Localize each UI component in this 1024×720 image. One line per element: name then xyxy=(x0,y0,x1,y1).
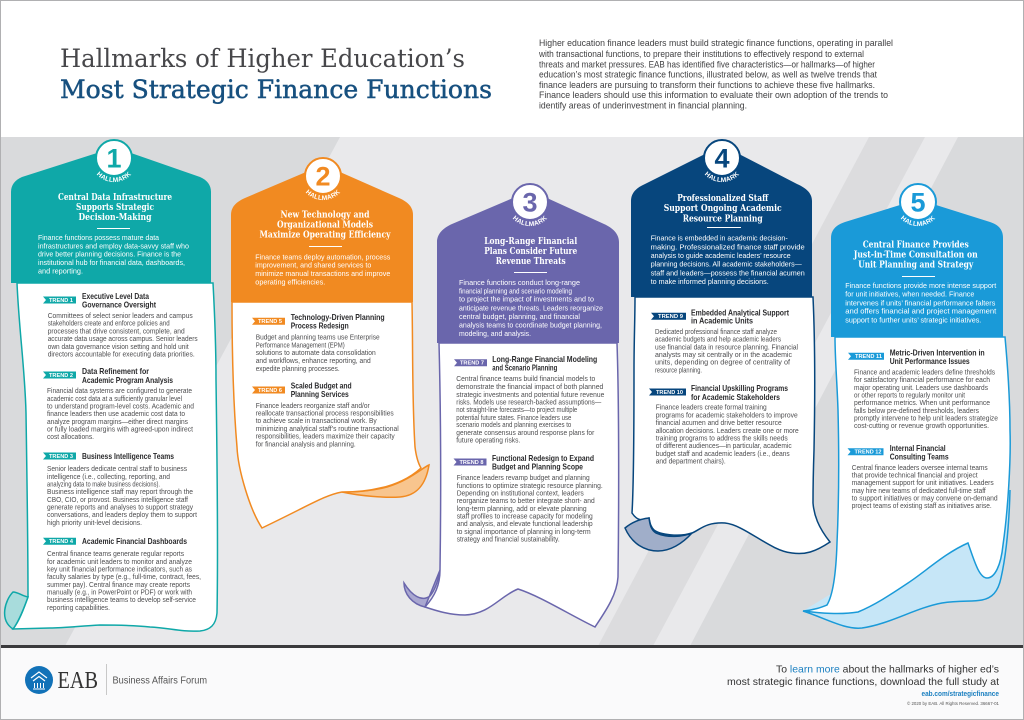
badge number 4 xyxy=(703,139,741,182)
description 5: support to further units’ strategic initiatives. xyxy=(845,315,981,324)
heading 1 xyxy=(58,193,172,229)
panel: hallmark 3 xyxy=(403,183,620,628)
trend 6: for financial analysis and planning. xyxy=(256,442,356,448)
trend 7: scenario models and planning exercises to xyxy=(456,422,571,429)
heading 5: Unit Planning and Strategy xyxy=(858,260,974,270)
trend 8: Finance leaders revamp budget and planning xyxy=(457,475,590,482)
trend 10: financial acumen and drive better resource xyxy=(656,420,782,427)
trend 2: or fully loaded margins with agreed-upon indirect xyxy=(47,426,193,434)
trend 10: allocation decisions. Leaders create one or more xyxy=(656,428,799,435)
trend 10: programs for academic stakeholders to improve xyxy=(656,412,798,420)
description 1: institutional hub for financial data, dashboards, xyxy=(38,258,185,267)
trend 7: not straight-line forecasts—to project multiple xyxy=(456,407,577,414)
trend 1: Governance Oversight xyxy=(82,300,156,310)
description 1: and reporting. xyxy=(38,267,83,276)
header 2 xyxy=(231,172,413,302)
trend 4: key unit financial performance indicators, such as xyxy=(47,566,192,574)
trend 1 xyxy=(43,291,198,359)
trend 7: Central finance teams build financial models to xyxy=(456,376,595,383)
trend 10: TREND 10 xyxy=(656,390,683,396)
trend 7: and Scenario Planning xyxy=(492,362,557,372)
heading 4: Support Ongoing Academic xyxy=(664,204,782,214)
trend 6: minimizing analytical staff’s routine transactional xyxy=(256,426,399,433)
call to action: most strategic finance functions, download the full study at xyxy=(727,676,999,688)
trend 2 xyxy=(43,366,194,441)
trend 4: reporting capabilities. xyxy=(47,605,110,612)
title: Most Strategic Finance Functions xyxy=(60,75,492,104)
trend 12: to support initiatives or may convene on-demand xyxy=(852,496,998,502)
intro text: with transactional functions, to prepare their institutions to effectively respond to external xyxy=(538,49,864,60)
trend 7 xyxy=(454,354,604,444)
description 4: analysis to guide academic leaders’ resource xyxy=(651,251,791,260)
trend 11: Unit Performance Issues xyxy=(890,356,970,366)
description 3: financial planning and scenario modeling xyxy=(459,286,572,295)
description 4 xyxy=(651,234,805,286)
trend 1: processes that drive consistent, complete, and xyxy=(48,328,185,336)
badge number 4: 4 xyxy=(714,144,730,174)
panel: hallmark 2 xyxy=(231,157,430,529)
trend 7: potential future states. Finance leaders use xyxy=(456,415,571,422)
badge number 2: 2 xyxy=(315,162,331,192)
description 3 xyxy=(459,278,603,338)
badge number 1: HALLMARK xyxy=(96,171,132,182)
description 2: operating efficiencies. xyxy=(255,278,325,287)
EAB wordmark: EAB xyxy=(58,668,98,694)
trend 5: and workflows, enhance reporting, and xyxy=(256,358,371,365)
trend 8: and analysis, and elevate functional leadership xyxy=(457,521,593,528)
trend 8: TREND 8 xyxy=(460,460,484,466)
description 3: Finance functions conduct long-range xyxy=(459,278,580,287)
trend 10: budget staff and academic leaders (i.e., deans xyxy=(656,451,790,458)
trend 8: functions to optimize strategic resource planning. xyxy=(457,483,603,490)
title: Hallmarks of Higher Education’s xyxy=(60,44,465,73)
heading 5: Just-in-Time Consultation on xyxy=(853,250,978,260)
heading 4: Resource Planning xyxy=(683,214,763,224)
description 4: planning decisions. All academic stakeholders— xyxy=(651,260,802,269)
trend 8: staff profiles to increase capacity for modeling xyxy=(457,514,593,520)
trend 12: TREND 12 xyxy=(854,450,882,456)
description 3: anticipate revenue threats. Leaders reorganize xyxy=(459,304,603,312)
trend 9: TREND 9 xyxy=(658,314,683,320)
trend 9: analysts may sit centrally or in the academic xyxy=(655,352,792,359)
description 2 xyxy=(255,252,391,287)
trend 12: Consulting Teams xyxy=(890,452,949,462)
trend 10: Finance leaders create formal training xyxy=(656,404,767,412)
call to action: eab.com/strategicfinance xyxy=(922,689,999,698)
heading 5: Central Finance Provides xyxy=(863,240,969,250)
curled corner 2 xyxy=(342,465,429,497)
trend 6: Scaled Budget and xyxy=(291,380,352,390)
badge number 2: HALLMARK xyxy=(306,189,340,200)
description 3: analysis teams to coordinate budget planning, xyxy=(459,320,602,330)
intro text: threats and market pressures. EAB has identified five characteristics—or hallmarks—of higher xyxy=(539,59,875,70)
header 1 xyxy=(11,153,211,283)
trend 2: Financial data systems are configured to generate xyxy=(47,388,192,395)
trend 9 xyxy=(651,308,798,374)
badge number 1 xyxy=(96,139,132,182)
description 4: staff and leaders—possess the financial acumen xyxy=(651,268,805,277)
trend 4: TREND 4 xyxy=(49,539,73,545)
trend 4 xyxy=(43,536,201,612)
trend 4: summer pay). Central finance may create reports xyxy=(47,582,190,589)
trend 5: Budget and planning teams use Enterprise xyxy=(256,334,380,342)
badge number 1: 1 xyxy=(106,144,122,174)
description 3: to project the impact of investments and to xyxy=(459,295,594,304)
trend 3: Business intelligence staff may report through the xyxy=(47,489,193,496)
trend 6 xyxy=(252,380,399,448)
trend 3: Senior leaders dedicate central staff to business xyxy=(47,466,187,473)
badge number 3: 3 xyxy=(522,188,538,218)
trend 3 xyxy=(43,451,197,527)
heading 2 xyxy=(260,210,391,247)
heading 3 xyxy=(484,237,578,273)
trend 9: resource planning. xyxy=(655,367,702,374)
trend 6: TREND 6 xyxy=(258,388,282,394)
trend 12: project teams of existing staff as initiatives arise. xyxy=(852,503,992,510)
description 1: drive better planning decisions. Finance is the xyxy=(38,250,181,259)
trend 11: TREND 11 xyxy=(855,354,882,360)
trend 8: Depending on institutional context, leaders xyxy=(457,490,584,498)
trend 8: Budget and Planning Scope xyxy=(492,462,583,472)
title xyxy=(60,44,492,104)
trend 9: in Academic Units xyxy=(691,316,753,326)
trend 10 xyxy=(649,383,799,466)
trend 12: may hire new teams of dedicated full-time staff xyxy=(852,488,986,495)
heading 3: Long-Range Financial xyxy=(484,237,578,247)
badge number 5: 5 xyxy=(910,188,926,218)
header 5 xyxy=(831,205,1003,337)
trend 5: Technology-Driven Planning xyxy=(291,312,385,322)
intro text xyxy=(538,38,893,112)
heading 4 xyxy=(664,194,782,228)
heading 2: Organizational Models xyxy=(277,220,373,230)
trend 12: that provide technical financial and project xyxy=(852,472,978,480)
trend 3: intelligence (i.e., collecting, reporting, and xyxy=(47,474,170,481)
footer xyxy=(0,645,1024,719)
trend 8: long-term planning, add or elevate planning xyxy=(457,506,587,513)
scroll body 4 xyxy=(632,297,830,554)
icon: EAB logo xyxy=(25,666,53,694)
trend 2: cost allocations. xyxy=(47,434,94,441)
trend 10: training programs to address the skills needs xyxy=(656,436,788,442)
trend 3: conversations, and leaders deploy them to support xyxy=(47,512,197,519)
scroll body 1 xyxy=(13,283,217,631)
curled corner 4 xyxy=(625,518,692,551)
trend 5 xyxy=(252,312,385,373)
trend 8: reorganize teams to better integrate short- and xyxy=(457,498,595,505)
trend 8: strategy and financial sustainability. xyxy=(457,536,560,544)
description 4: making. Professionalized finance staff provide xyxy=(651,242,805,251)
trend 4: Academic Financial Dashboards xyxy=(82,536,187,546)
trend 4: for academic unit leaders to monitor and analyze xyxy=(47,559,192,566)
trend 11: Metric-Driven Intervention in xyxy=(890,348,985,358)
trend 10: and department chairs). xyxy=(656,458,726,466)
intro text: Higher education finance leaders must build strategic finance functions, operating in parallel xyxy=(539,38,893,49)
trend 4: business intelligence teams to develop self-service xyxy=(47,597,196,604)
trend 11: Finance and academic leaders define thresholds xyxy=(854,370,995,376)
description 1 xyxy=(38,233,189,276)
trend 1: Executive Level Data xyxy=(82,291,149,301)
trend 2: Data Refinement for xyxy=(82,366,150,376)
trend 5: TREND 5 xyxy=(258,319,282,325)
trend 7: risks. Models use research-backed assumptions— xyxy=(456,400,601,406)
trend 6: Planning Services xyxy=(291,389,349,399)
trend 1: directors accountable for executing data priorities. xyxy=(48,352,195,359)
header 3 xyxy=(437,198,619,343)
trend 11: performance metrics. When unit performance xyxy=(854,400,990,407)
trend 9: academic budgets and help academic leaders xyxy=(655,337,781,344)
trend 3: Business Intelligence Teams xyxy=(82,451,174,461)
trend 5: Process Redesign xyxy=(291,320,349,330)
panel: hallmark 5 xyxy=(802,183,1011,629)
badge number 5 xyxy=(899,183,937,226)
forum name: Business Affairs Forum xyxy=(112,676,207,686)
badge number 4: HALLMARK xyxy=(704,171,740,182)
description 1: Finance functions possess mature data xyxy=(38,233,160,242)
description 4: to make informed planning decisions. xyxy=(651,277,769,286)
description 5: Finance functions provide more intense support xyxy=(845,281,997,290)
trend 6: to achieve scale in transactional work. By xyxy=(256,418,377,425)
trend 3: TREND 3 xyxy=(49,454,73,460)
trend 11: promptly intervene to help unit leaders strategize xyxy=(854,416,998,422)
trend 4: Central finance teams generate regular reports xyxy=(47,551,184,558)
badge number 3: HALLMARK xyxy=(512,215,548,226)
curled sheet 5 xyxy=(803,490,1010,628)
trend 5: Performance Management (EPM) xyxy=(256,342,345,350)
intro text: finance leaders are pursuing to transform their functions to achieve these five hallmarks. xyxy=(539,80,875,91)
trend 6: reallocate transactional process responsibilities xyxy=(256,410,394,418)
trend 9: Embedded Analytical Support xyxy=(691,308,789,318)
panel: hallmark 4 xyxy=(624,139,831,554)
trend 3: generate reports and analyses to support strategy xyxy=(47,504,193,512)
call to action xyxy=(727,664,999,706)
trend 7: demonstrate the financial impact of both planned xyxy=(456,384,603,391)
heading 1: Central Data Infrastructure xyxy=(58,193,172,203)
description 5: intervenes if units’ financial performance falters xyxy=(845,298,996,307)
call to action: © 2020 by EAB. All Rights Reserved. 36667-01 xyxy=(907,700,999,706)
description 5 xyxy=(845,281,997,324)
description 3: central budget, planning, and financial xyxy=(459,312,580,321)
heading 5 xyxy=(853,240,978,277)
description 5: and offers financial and project management xyxy=(845,307,997,316)
description 5: for unit initiatives, when needed. Finance xyxy=(845,290,974,299)
trend 3: high priority unit-level decisions. xyxy=(47,520,142,527)
trend 2: academic cost data at a sufficiently granular level xyxy=(47,396,182,403)
trend 5: expedite planning processes. xyxy=(256,366,340,373)
trend 8 xyxy=(454,453,603,544)
intro text: identify areas of underinvestment in financial planning. xyxy=(539,100,747,112)
badge number 3 xyxy=(511,183,549,226)
heading 4: Professionalized Staff xyxy=(677,194,769,204)
trend 5: solutions to automate data consolidation xyxy=(256,350,376,357)
heading 2: Maximize Operating Efficiency xyxy=(260,230,391,240)
trend 2: Academic Program Analysis xyxy=(82,375,173,385)
trend 9: Dedicated professional finance staff analyze xyxy=(655,329,777,336)
trend 7: strategic investments and potential future revenue xyxy=(456,392,604,399)
heading 1: Supports Strategic xyxy=(76,203,154,213)
trend 12 xyxy=(848,443,998,510)
call to action: To learn more about the hallmarks of higher ed’s xyxy=(776,664,999,676)
description 3: modeling, and analysis. xyxy=(459,329,531,338)
trend 1: TREND 1 xyxy=(49,298,73,304)
trend 3: CBO, CIO, or provost. Business intelligence staff xyxy=(47,497,188,504)
trend 11: for satisfactory financial performance for each xyxy=(854,377,990,384)
trend 8: to signal importance of planning in long-term xyxy=(457,529,591,536)
trend 4: manually (e.g., in PowerPoint or PDF) or work with xyxy=(47,590,192,596)
intro text: education’s most strategic finance functions, illustrated below, as well as twelve trends that xyxy=(539,70,877,81)
heading 1: Decision-Making xyxy=(78,213,152,223)
trend 9: units, depending on degree of centrality of xyxy=(655,360,790,367)
trend 6: responsibilities, leaders maximize their capacity xyxy=(256,434,395,440)
description 2: improvement, and shared services to xyxy=(255,261,371,270)
trend 11: falls below pre-defined thresholds, leaders xyxy=(854,408,979,415)
trend 2: finance leaders then use academic cost data to xyxy=(47,411,185,418)
trend 12: Central finance leaders oversee internal teams xyxy=(852,465,988,472)
trend 2: TREND 2 xyxy=(49,373,73,379)
trend 1: own data governance vision setting and hold unit xyxy=(48,344,189,351)
panel: hallmark 1 xyxy=(4,139,218,632)
header 4 xyxy=(631,154,812,297)
description 2: minimize manual transactions and improve xyxy=(255,269,390,278)
trend 7: future operating risks. xyxy=(456,438,520,444)
trend 7: Long-Range Financial Modeling xyxy=(492,354,597,364)
trend 8: Functional Redesign to Expand xyxy=(492,453,594,463)
scroll body 5 xyxy=(803,337,1010,614)
trend 10: Financial Upskilling Programs xyxy=(691,383,788,393)
trend 11: or other reports to regularly monitor unit xyxy=(854,392,965,400)
curled corner 3 xyxy=(404,570,440,607)
scroll body 3 xyxy=(425,343,619,627)
trend 3: analyzing data to make business decisions). xyxy=(47,482,160,488)
trend 12: Internal Financial xyxy=(890,443,946,453)
trend 6: Finance leaders reorganize staff and/or xyxy=(256,403,370,410)
description 4: Finance is embedded in academic decision- xyxy=(651,234,788,243)
trend 12: management support for unit initiatives. Leaders xyxy=(852,480,994,487)
trend 4: faculty salaries by type (e.g., full-time, contract, fees, xyxy=(47,574,201,581)
intro text: Finance leaders should use this information to evaluate their own adoption of the trends to xyxy=(539,90,888,101)
trend 1: stakeholders create and enforce policies and xyxy=(48,321,170,328)
background band xyxy=(0,137,1024,646)
trend 10: of different audiences—in particular, academic xyxy=(656,443,792,450)
trend 1: accurate data usage across campus. Senior leaders xyxy=(48,336,198,343)
trend 11 xyxy=(848,348,998,430)
trend 7: TREND 7 xyxy=(460,361,484,367)
trend 10: for Academic Stakeholders xyxy=(691,392,780,402)
trend 1: Committees of select senior leaders and campus xyxy=(48,313,193,320)
trend 9: use financial data in resource planning. Financial xyxy=(655,344,798,351)
trend 2: to understand program-level costs. Academic and xyxy=(47,404,194,410)
trend 7: generate consensus around response plans for xyxy=(456,430,595,437)
badge number 2 xyxy=(304,157,342,200)
description 1: infrastructures and employ data-savvy staff who xyxy=(38,241,189,250)
description 2: Finance teams deploy automation, process xyxy=(255,252,391,261)
heading 3: Plans Consider Future xyxy=(484,247,578,257)
badge number 5: HALLMARK xyxy=(900,215,936,226)
heading 3: Revenue Threats xyxy=(496,257,566,267)
scroll body 2 xyxy=(232,302,421,528)
trend 11: major operating unit. Leaders use dashboards xyxy=(854,385,988,392)
trend 2: analyze program margins—either direct margins xyxy=(47,419,188,426)
trend 11: cost-cutting or revenue growth opportunities. xyxy=(854,423,989,430)
heading 2: New Technology and xyxy=(280,210,370,220)
curled corner 1 xyxy=(5,592,28,629)
